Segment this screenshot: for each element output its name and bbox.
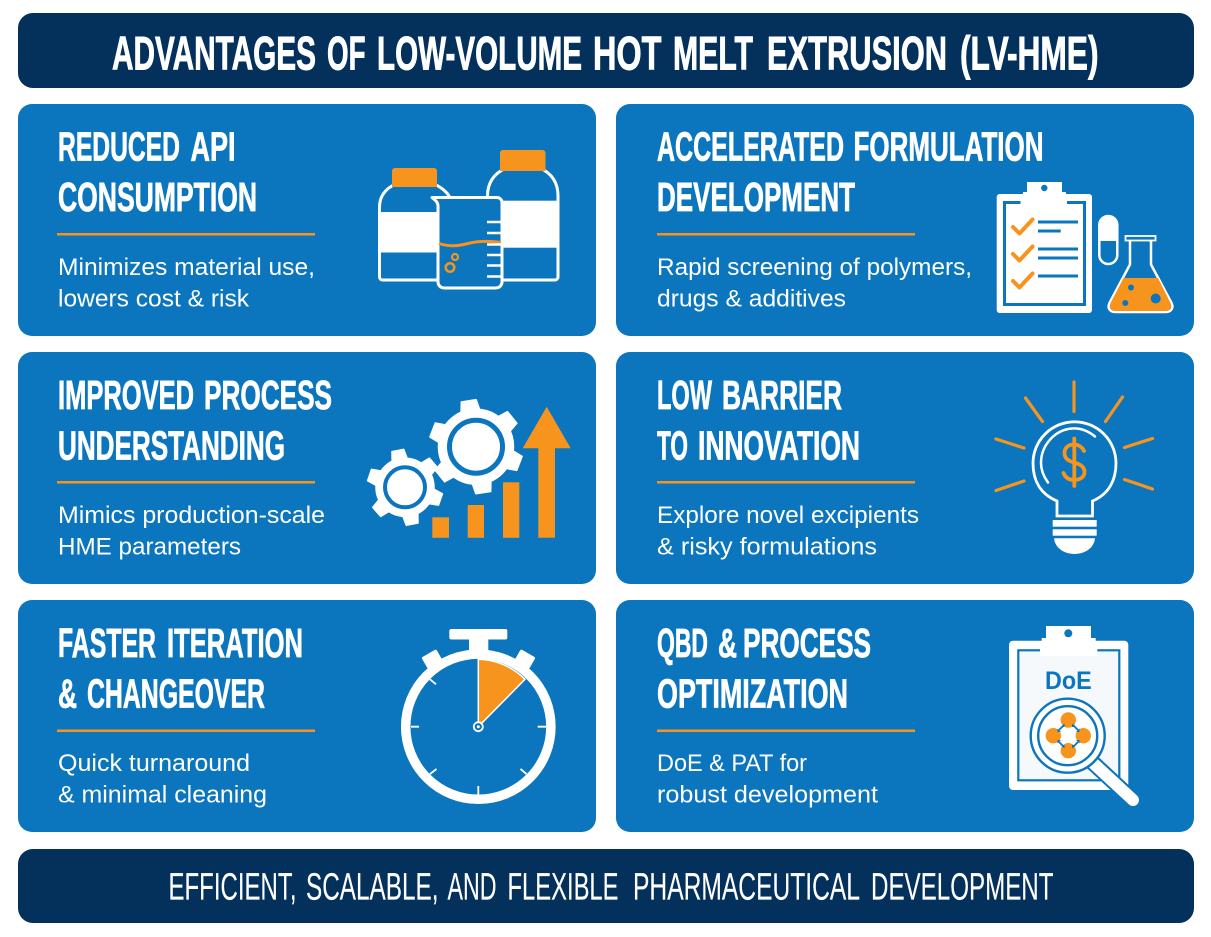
heading: reduced API consumption: CONSUMPTION	[58, 174, 257, 220]
icon: clipboard checklist, capsule and flask	[997, 182, 1172, 313]
heading: low barrier to innovation: TO	[657, 422, 688, 468]
title banner: HOT	[593, 28, 662, 80]
heading: accelerated formulation development: ACCELERATED	[657, 124, 844, 170]
heading: improved process understanding: UNDERSTANDING	[58, 422, 285, 468]
title banner: ADVANTAGES	[112, 28, 316, 80]
title banner: EXTRUSION	[767, 28, 947, 80]
heading: faster iteration and changeover: ITERATION	[167, 620, 303, 666]
heading: accelerated formulation development	[657, 124, 1044, 220]
text: improved process description: Mimics production-scale	[58, 502, 325, 529]
footer banner: EFFICIENT,	[168, 866, 296, 908]
text: faster iteration description	[58, 750, 267, 808]
panel: low barrier to innovation	[616, 352, 1194, 584]
footer banner: FLEXIBLE	[508, 866, 618, 908]
title banner: LOW-VOLUME	[377, 28, 582, 80]
heading: reduced API consumption: API	[190, 124, 236, 170]
heading: reduced API consumption	[58, 124, 257, 220]
text: reduced API description: Minimizes material use,	[58, 254, 315, 281]
title banner: MELT	[673, 28, 753, 80]
text: QbD description: DoE & PAT for	[657, 750, 807, 777]
footer banner	[18, 849, 1194, 923]
footer banner: SCALABLE,	[306, 866, 438, 908]
icon: gears and rising bar chart	[367, 399, 571, 538]
heading: faster iteration and changeover: CHANGEOVER	[87, 670, 265, 716]
text: accelerated formulation description	[657, 254, 972, 312]
text: reduced API description	[58, 254, 315, 312]
icon: DoE clipboard with magnifier	[1009, 626, 1133, 800]
text: accelerated formulation description: Rapid screening of polymers,	[657, 254, 972, 281]
icon: bottles and beaker	[378, 150, 559, 288]
title banner: (LV-HME)	[960, 28, 1098, 80]
heading: low barrier to innovation: BARRIER	[722, 372, 842, 418]
text: low barrier description: & risky formulations	[657, 534, 877, 560]
heading: QbD and process optimization: OPTIMIZATION	[657, 670, 848, 716]
title banner: OF	[327, 28, 366, 80]
text: improved process description	[58, 502, 325, 560]
text: accelerated formulation description: drugs & additives	[657, 286, 846, 312]
heading: faster iteration and changeover: FASTER	[58, 620, 156, 666]
heading: faster iteration and changeover: &	[58, 670, 77, 716]
heading: improved process understanding: IMPROVED	[58, 372, 194, 418]
panel: improved process understanding	[18, 352, 596, 584]
heading: QbD and process optimization: QBD	[657, 620, 708, 666]
text: QbD description: robust development	[657, 782, 878, 808]
heading: accelerated formulation development: FORMULATION	[854, 124, 1044, 170]
text: faster iteration description: Quick turnaround	[58, 750, 250, 777]
heading: reduced API consumption: REDUCED	[58, 124, 180, 170]
footer banner: DEVELOPMENT	[871, 866, 1054, 908]
heading: faster iteration and changeover	[58, 620, 303, 716]
heading: improved process understanding: PROCESS	[204, 372, 332, 418]
heading: low barrier to innovation: LOW	[657, 372, 712, 418]
text: reduced API description: lowers cost & risk	[58, 286, 250, 312]
text: faster iteration description: & minimal cleaning	[58, 782, 267, 808]
icon: stopwatch	[406, 629, 551, 799]
heading: QbD and process optimization: PROCESS	[743, 620, 871, 666]
heading: QbD and process optimization	[657, 620, 871, 716]
text: low barrier description	[657, 502, 919, 560]
heading: QbD and process optimization: &	[718, 620, 737, 666]
text: improved process description: HME parameters	[58, 534, 241, 560]
panel: reduced API consumption	[18, 104, 596, 336]
footer banner: AND	[448, 866, 496, 908]
text: QbD description	[657, 750, 878, 808]
heading: low barrier to innovation: INNOVATION	[698, 422, 860, 468]
heading: low barrier to innovation	[657, 372, 860, 468]
text: low barrier description: Explore novel excipients	[657, 502, 919, 529]
heading: improved process understanding	[58, 372, 332, 468]
panel: faster iteration and changeover	[18, 600, 596, 832]
heading: accelerated formulation development: DEVELOPMENT	[657, 174, 855, 220]
panel: QbD and process optimization	[616, 600, 1194, 832]
panel: accelerated formulation development	[616, 104, 1194, 336]
footer banner: PHARMACEUTICAL	[633, 866, 860, 908]
title banner	[18, 13, 1194, 88]
icon: DoE clipboard with magnifier: DoE	[1045, 667, 1092, 695]
icon: light bulb with dollar sign	[996, 382, 1152, 554]
